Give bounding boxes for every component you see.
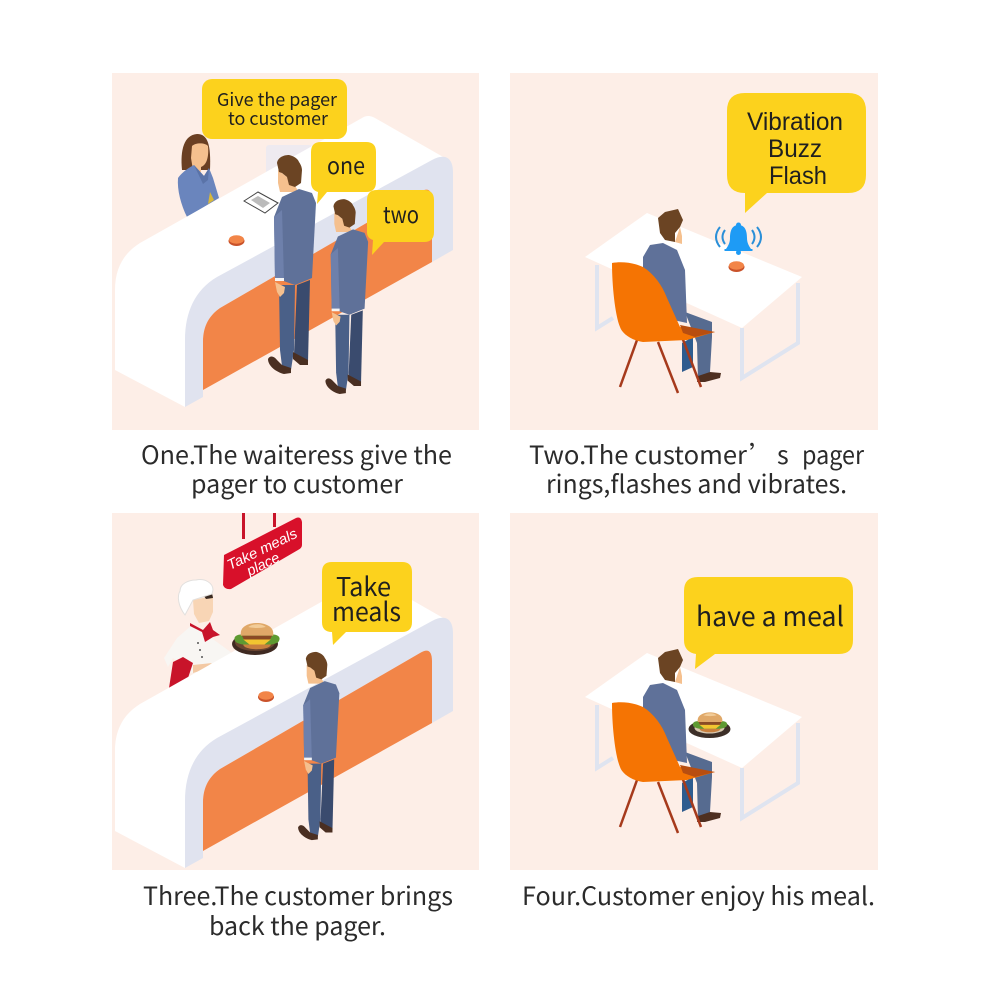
icon: ringing bell xyxy=(716,222,761,255)
bubble: give the pager: Give the pager xyxy=(217,86,338,112)
bubble: one: one xyxy=(327,147,365,181)
bubble: two xyxy=(367,190,434,255)
pager xyxy=(728,261,744,272)
burger on plate xyxy=(688,712,730,738)
counter xyxy=(115,577,453,868)
customer one xyxy=(268,155,316,374)
bubble: vibration buzz flash: Buzz xyxy=(768,135,822,163)
waitress xyxy=(178,134,219,217)
caption: step two: pager xyxy=(802,436,864,472)
paper form xyxy=(244,192,278,213)
hanging sign: take meals place: Take meals xyxy=(225,526,300,574)
caption: step one: pager to customer xyxy=(191,465,403,501)
table, chair and seated customer xyxy=(585,209,802,393)
panel: step four xyxy=(510,513,878,870)
bubble: take meals: meals xyxy=(332,592,401,629)
caption: step two: Two.The customer xyxy=(529,436,747,472)
caption: step three xyxy=(143,877,453,943)
bubble: take meals xyxy=(322,562,412,645)
panel: step one xyxy=(112,73,479,430)
caption: step three: Three.The customer brings xyxy=(143,877,453,913)
caption: step one xyxy=(141,436,452,501)
caption: step four: Four.Customer enjoy his meal. xyxy=(522,877,875,913)
bubble: vibration buzz flash xyxy=(727,93,866,213)
caption: step one: One.The waiteress give the xyxy=(141,436,452,472)
panel: step three xyxy=(112,513,479,870)
hanging sign: take meals place: place xyxy=(243,550,283,580)
bubble: take meals: Take xyxy=(336,567,391,604)
bubble: two: two xyxy=(383,196,419,230)
burger on plate xyxy=(232,623,280,655)
caption: step two: ’ xyxy=(749,436,774,472)
caption: step two: rings,flashes and vibrates. xyxy=(546,465,847,501)
bubble: one xyxy=(311,142,376,204)
hanging sign: take meals place xyxy=(223,513,302,589)
table, chair and seated customer xyxy=(585,649,802,833)
bubble: have a meal xyxy=(684,577,853,669)
caption: step three: back the pager. xyxy=(209,907,386,943)
screen behind customer xyxy=(266,145,312,191)
bubble: vibration buzz flash: Vibration xyxy=(747,108,843,136)
pager xyxy=(228,235,244,246)
caption: step two xyxy=(529,436,864,501)
counter xyxy=(115,116,453,407)
panel: step two xyxy=(510,73,878,430)
bubble: give the pager xyxy=(202,79,347,139)
customer two xyxy=(325,199,368,394)
caption: step two: s xyxy=(777,436,789,472)
bubble: give the pager: to customer xyxy=(228,105,329,131)
pager xyxy=(258,691,274,702)
bubble: have a meal: have a meal xyxy=(696,595,844,634)
bubble: vibration buzz flash: Flash xyxy=(769,162,827,190)
customer xyxy=(298,652,339,840)
chef xyxy=(164,580,237,688)
